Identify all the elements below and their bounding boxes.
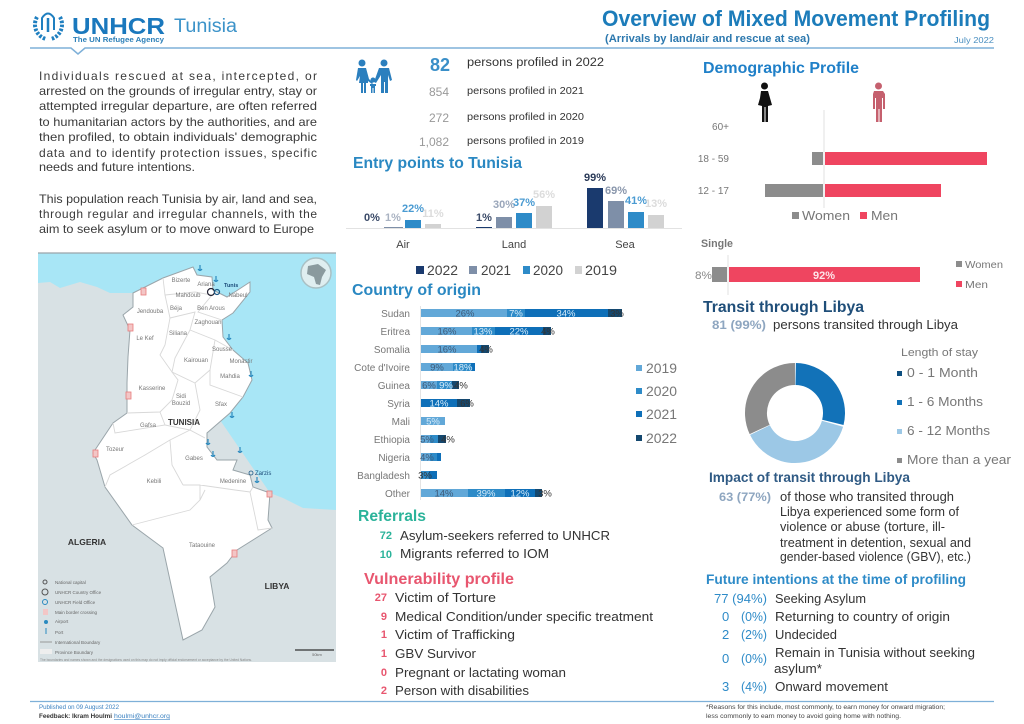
stacked bar chart: country of origin: Mali	[392, 417, 410, 428]
map of Tunisia: Tunis	[224, 283, 238, 289]
map labels: Mahdoub	[175, 293, 201, 299]
title: (Arrivals by land/air and rescue at sea)	[605, 33, 810, 45]
stacked bar chart: country of origin: 5%	[420, 434, 434, 446]
map labels: Siliana	[169, 331, 188, 337]
header logo: UNHCR: The UN Refugee Agency	[73, 37, 164, 44]
panel: future intentions	[706, 571, 975, 694]
panel: future intentions: Remain in Tunisia without seeking	[775, 645, 975, 660]
bar chart: age and sex: 60+	[712, 122, 729, 133]
heading: Demographic Profile: Demographic Profile	[703, 60, 859, 77]
legend: length of stay: More than a year	[907, 452, 1012, 467]
map labels: Nabeul	[228, 293, 248, 299]
map legend: National capital	[55, 580, 86, 585]
panel: vulnerability profile: Pregnant or lactating woman	[395, 665, 566, 680]
map labels: Kasserine	[139, 386, 166, 392]
panel: transit through Libya: 81 (99%)	[712, 318, 766, 332]
map legend: Port	[55, 630, 64, 635]
map labels: Tozeur	[106, 447, 124, 453]
stacked bar chart: country of origin: 13%	[473, 326, 493, 338]
bar chart: entry points: Sea	[615, 239, 636, 251]
panel: future intentions: 3	[722, 679, 729, 694]
province boundaries	[105, 278, 272, 530]
map labels: Tataouine	[189, 543, 216, 549]
intro text: Individuals rescued at sea, intercepted, or	[39, 69, 317, 83]
stacked bar chart: country of origin: 6%	[460, 398, 474, 410]
stacked bar chart: country of origin: 4%	[454, 380, 468, 392]
stat: persons profiled	[419, 55, 604, 149]
footer: publication info: Feedback: Ikram Houlmi	[39, 714, 112, 720]
intro text	[39, 69, 317, 236]
header logo: UNHCR	[35, 13, 237, 44]
panel: impact of transit through Libya: violence or abuse (torture, ill-	[780, 520, 945, 534]
panel: vulnerability profile: 0	[381, 667, 387, 679]
icon: family	[356, 60, 392, 93]
stacked bar chart: country of origin: Guinea	[378, 381, 410, 392]
footer: publication info: Published on 09 August 2022	[39, 705, 120, 711]
panel: referrals: Migrants referred to IOM	[400, 546, 549, 561]
panel: referrals	[358, 508, 610, 561]
bar chart: single: Men	[965, 280, 988, 291]
panel: future intentions: 2	[722, 627, 729, 642]
panel: transit through Libya: Transit through Libya	[703, 299, 864, 316]
panel: referrals: Referrals	[358, 508, 426, 525]
stacked bar chart: country of origin: 6%	[422, 380, 436, 392]
panel: future intentions: (0%)	[741, 609, 767, 624]
map legend: Main border crossing	[55, 610, 98, 615]
panel: future intentions: Future intentions at the time of profiling	[706, 571, 966, 587]
stacked bar chart: country of origin: 16%	[437, 326, 457, 338]
stacked bar chart: country of origin: Eritrea	[381, 327, 410, 338]
bar chart: entry points: 1%	[385, 212, 401, 224]
panel: impact of transit through Libya: Libya experienced some form of	[780, 505, 960, 519]
icon: man	[873, 82, 885, 122]
chart legend	[636, 360, 677, 446]
intro text: data and to identify protection issues, specific	[39, 146, 317, 160]
map labels: Sfax	[215, 402, 227, 408]
panel: vulnerability profile: GBV Survivor	[395, 646, 477, 661]
stacked bar chart: country of origin: 4%	[541, 326, 555, 338]
panel: impact of transit through Libya	[709, 469, 971, 564]
stacked bar chart: country of origin: 14%	[434, 488, 454, 500]
footer: publication info: houlmi@unhcr.org	[114, 714, 170, 720]
map labels: Ben Arous	[197, 306, 225, 312]
stacked bar chart: country of origin: 9%	[439, 380, 453, 392]
bar chart: entry points: 69%	[605, 185, 627, 197]
locator globe	[301, 258, 331, 288]
map labels	[106, 278, 253, 549]
legend: length of stay: 0 - 1 Month	[907, 365, 978, 380]
panel: future intentions: Seeking Asylum	[775, 591, 866, 606]
panel: vulnerability profile: Person with disabilities	[395, 683, 529, 698]
heading: Country of origin: Country of origin	[352, 282, 481, 299]
panel: vulnerability profile: 2	[381, 685, 387, 697]
title	[602, 6, 995, 45]
bar chart: entry points: 22%	[402, 203, 424, 215]
bar chart: age and sex: 18 - 59	[698, 154, 729, 165]
bar chart: entry points: 1%	[476, 212, 492, 224]
map labels: Gabes	[185, 456, 203, 462]
intro text: aim to seek asylum or to move onward to Europe	[39, 222, 314, 236]
stat: persons profiled: 82	[430, 55, 450, 75]
panel: vulnerability profile: Vulnerability profile	[364, 571, 514, 588]
stat: persons profiled: persons profiled in 2022	[467, 57, 604, 69]
bar chart: entry points: 0%	[364, 212, 380, 224]
title: July 2022	[954, 36, 995, 45]
stacked bar chart: country of origin: Bangladesh	[357, 471, 410, 482]
header logo: UNHCR: Tunisia	[174, 16, 237, 37]
panel: referrals: 72	[380, 530, 392, 542]
bar chart: single	[695, 238, 1003, 295]
sea	[38, 253, 336, 510]
stacked bar chart: country of origin: Sudan	[381, 309, 410, 320]
panel: vulnerability profile: Medical Condition/under specific treatment	[395, 609, 653, 624]
map of Tunisia: The boundaries and names shown and the designations used on this map do not imply official endorsement or acceptance by the United Nations.	[40, 658, 252, 662]
stat: persons profiled: 1,082	[419, 135, 449, 149]
map labels: Kairouan	[184, 358, 208, 364]
bar chart: entry points: Land	[502, 239, 526, 251]
stat: persons profiled: 854	[429, 85, 449, 99]
stat: persons profiled: persons profiled in 2020	[467, 112, 584, 123]
panel: vulnerability profile: Victim of Torture	[395, 590, 496, 605]
panel: referrals: 10	[380, 549, 392, 561]
bar chart: age and sex	[698, 110, 987, 223]
map legend: UNHCR Field Office	[55, 600, 96, 605]
bar chart: age and sex: Women	[802, 208, 850, 223]
map of Tunisia: LIBYA	[265, 581, 289, 591]
chart legend: 2021	[646, 406, 677, 422]
stacked bar chart: country of origin: 18%	[453, 362, 473, 374]
map labels: Ariana	[197, 282, 215, 288]
bar chart: single: 92%	[813, 270, 835, 282]
map labels: Le Kef	[136, 336, 154, 342]
chart legend: 2022	[646, 430, 677, 446]
map labels: Béja	[170, 306, 183, 312]
chart legend	[416, 262, 617, 278]
bar chart: age and sex: 12 - 17	[698, 186, 729, 197]
chart legend: 2020	[646, 383, 677, 399]
intro text: then profiled, to obtain individuals' demographic	[39, 130, 317, 144]
stacked bar chart: country of origin: Ethiopia	[374, 435, 410, 446]
Tunisia land	[93, 267, 272, 640]
bar chart: entry points: 30%	[493, 199, 515, 211]
bar chart: entry points: 13%	[645, 198, 667, 210]
map labels: Jendouba	[137, 309, 164, 315]
panel: impact of transit through Libya: 63 (77%)	[719, 490, 771, 504]
stacked bar chart: country of origin: 3%	[610, 308, 624, 320]
intro text: attempted irregular departure, are often referred	[39, 99, 317, 113]
stacked bar chart: country of origin: 3%	[538, 488, 552, 500]
map labels: Kebili	[147, 479, 161, 485]
map of Tunisia: TUNISIA	[168, 418, 200, 427]
office markers	[208, 288, 214, 296]
panel: vulnerability profile: 1	[381, 648, 387, 660]
chart legend: 2019	[585, 262, 617, 278]
panel: future intentions: 77 (94%)	[714, 591, 767, 606]
header logo: UNHCR: UNHCR	[72, 13, 165, 39]
intro text: to humanitarian actors by the authorities, and are	[39, 115, 317, 129]
panel: future intentions: Returning to country of origin	[775, 609, 950, 624]
map labels: Sousse	[212, 347, 233, 353]
panel: transit through Libya: persons transited through Libya	[773, 318, 958, 332]
panel: vulnerability profile: 27	[375, 592, 387, 604]
intro text: through regular and irregular channels, with the	[39, 207, 317, 221]
legend: length of stay	[897, 347, 1012, 467]
stacked bar chart: country of origin: Other	[385, 489, 411, 500]
panel: future intentions: Undecided	[775, 627, 837, 642]
footnote	[706, 705, 945, 720]
map labels: Medenine	[220, 479, 247, 485]
map labels: Gafsa	[140, 423, 157, 429]
map legend: Airport	[55, 619, 69, 624]
map of Tunisia: Zarzis	[255, 471, 271, 477]
bar chart: single: Single	[701, 238, 733, 250]
stacked bar chart: country of origin: 4%	[441, 434, 455, 446]
panel: future intentions: (2%)	[741, 627, 767, 642]
bar chart: single: 8%	[695, 270, 712, 282]
map labels: Zaghouan	[194, 320, 222, 326]
title: Overview of Mixed Movement Profiling	[602, 6, 990, 31]
map labels: Sidi	[176, 394, 186, 400]
stacked bar chart: country of origin	[354, 306, 677, 500]
stacked bar chart: country of origin: Somalia	[374, 345, 410, 356]
panel: future intentions: 0	[722, 651, 729, 666]
map legend: International Boundary	[55, 640, 101, 645]
panel: future intentions: Onward movement	[775, 679, 888, 694]
panel: transit through Libya	[703, 299, 958, 332]
bar chart: entry points: 99%	[584, 172, 606, 184]
panel: future intentions: asylum*	[774, 661, 822, 676]
panel: impact of transit through Libya: treatment in detention, sexual and	[780, 536, 971, 550]
panel: future intentions: (4%)	[741, 679, 767, 694]
bar chart: entry points: 11%	[422, 208, 444, 220]
panel: vulnerability profile	[364, 571, 653, 698]
stacked bar chart: country of origin: Cote d'Ivoire	[354, 363, 410, 374]
map of Tunisia	[38, 253, 336, 662]
icon: UNHCR wreath emblem	[35, 14, 62, 39]
bar chart: single: Women	[965, 260, 1003, 271]
heading: Entry points to Tunisia: Entry points to Tunisia	[353, 155, 522, 172]
stacked bar chart: country of origin: 4%	[479, 344, 493, 356]
map legend	[40, 580, 102, 655]
bar chart: entry points: 37%	[513, 197, 535, 209]
panel: impact of transit through Libya: gender-based violence (GBV), etc.)	[780, 550, 971, 564]
panel: vulnerability profile: Victim of Trafficking	[395, 627, 515, 642]
stacked bar chart: country of origin: 14%	[429, 398, 449, 410]
map of Tunisia: 50km	[312, 652, 323, 657]
legend: length of stay: 1 - 6 Months	[907, 394, 984, 409]
bar chart: entry points	[346, 172, 682, 278]
stacked bar chart: country of origin: 22%	[509, 326, 529, 338]
stacked bar chart: country of origin: 16%	[437, 344, 457, 356]
port anchors	[198, 265, 259, 483]
icon: woman	[758, 82, 772, 122]
header rule with notch	[30, 48, 994, 54]
intro text: This population reach Tunisia by air, land and sea,	[39, 192, 317, 206]
stacked bar chart: country of origin: 34%	[556, 308, 576, 320]
panel: referrals: Asylum-seekers referred to UNHCR	[400, 528, 610, 543]
stacked bar chart: country of origin: 5%	[426, 416, 440, 428]
map labels: Bouzid	[172, 401, 190, 407]
stacked bar chart: country of origin: 26%	[455, 308, 475, 320]
stat: persons profiled: persons profiled in 2019	[467, 136, 584, 147]
map of Tunisia: ALGERIA	[68, 537, 106, 547]
donut chart: length of stay	[743, 361, 847, 465]
stat: persons profiled: persons profiled in 2021	[467, 86, 584, 97]
footer: publication info	[39, 705, 170, 720]
intro text: arrested on the grounds of irregular entry, stay or	[39, 84, 317, 98]
bar chart: entry points: Air	[396, 239, 410, 251]
legend: length of stay: Length of stay	[901, 347, 979, 359]
stacked bar chart: country of origin: 12%	[510, 488, 530, 500]
stacked bar chart: country of origin: 39%	[476, 488, 496, 500]
chart legend: 2021	[481, 262, 511, 278]
footer rule	[30, 700, 994, 702]
panel: impact of transit through Libya: of those who transited through	[780, 490, 954, 504]
panel: vulnerability profile: 9	[381, 611, 387, 623]
stacked bar chart: country of origin: 3%	[418, 470, 432, 482]
chart legend: 2020	[533, 262, 563, 278]
bar chart: entry points: 56%	[533, 189, 555, 201]
border crossings	[93, 288, 272, 557]
footnote: *Reasons for this include, most commonly, to earn money for onward migration;	[706, 705, 945, 711]
bar chart: age and sex: Men	[871, 208, 898, 223]
bar chart: entry points: 41%	[625, 195, 647, 207]
intro text: needs and future intentions.	[39, 160, 195, 174]
stacked bar chart: country of origin: Syria	[387, 399, 410, 410]
footnote: less commonly to earn money to avoid going home with nothing.	[706, 714, 901, 720]
legend: length of stay: 6 - 12 Months	[907, 423, 991, 438]
chart legend: 2019	[646, 360, 677, 376]
panel: future intentions: 0	[722, 609, 729, 624]
panel: impact of transit through Libya: Impact of transit through Libya	[709, 469, 910, 485]
panel: vulnerability profile: 1	[381, 629, 387, 641]
map labels: Mahdia	[220, 374, 240, 380]
panel: future intentions: (0%)	[741, 651, 767, 666]
map labels: Monastir	[229, 359, 253, 365]
stat: persons profiled: 272	[429, 111, 449, 125]
stacked bar chart: country of origin: 4%	[420, 452, 434, 464]
map legend: Province Boundary	[55, 650, 94, 655]
stacked bar chart: country of origin: 7%	[509, 308, 523, 320]
stacked bar chart: country of origin: Nigeria	[378, 453, 410, 464]
map labels: Bizerte	[172, 278, 191, 284]
chart legend: 2022	[427, 262, 458, 278]
map legend: UNHCR Country Office	[55, 590, 102, 595]
stacked bar chart: country of origin: 9%	[430, 362, 444, 374]
